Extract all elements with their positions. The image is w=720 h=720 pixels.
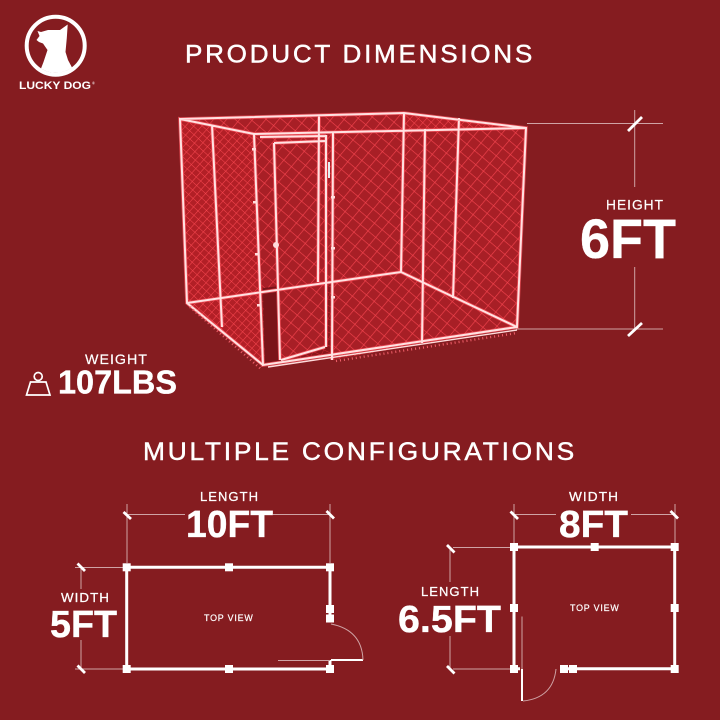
length dimension bbox=[124, 489, 334, 563]
length dimension: LENGTH bbox=[421, 584, 480, 599]
kennel left mesh bbox=[180, 119, 263, 365]
kennel frame bbox=[180, 113, 526, 369]
width dimension bbox=[50, 564, 123, 673]
width dimension: WIDTH bbox=[569, 489, 619, 504]
kennel front right mesh bbox=[332, 128, 526, 360]
kennel door mesh bbox=[275, 142, 325, 360]
top view floor plan: TOP VIEW bbox=[204, 613, 254, 623]
heading: multiple configurations: MULTIPLE CONFIGURATIONS bbox=[143, 438, 577, 466]
weight label: WEIGHT bbox=[85, 351, 148, 367]
length dimension: 6.5FT bbox=[398, 599, 501, 641]
length dimension bbox=[398, 545, 510, 674]
width dimension: 8FT bbox=[559, 504, 628, 546]
top view floor plan bbox=[123, 563, 363, 673]
plan: 8ft by 6.5ft bbox=[398, 489, 679, 701]
kennel back mesh bbox=[180, 113, 404, 303]
height value: 6FT bbox=[580, 207, 676, 270]
kennel door gap bbox=[263, 286, 281, 364]
kennel right mesh bbox=[401, 113, 526, 327]
length dimension: 10FT bbox=[186, 504, 273, 546]
height label: HEIGHT bbox=[606, 196, 664, 212]
logo: Lucky Dog: ® bbox=[92, 80, 95, 86]
length dimension: LENGTH bbox=[200, 489, 259, 504]
icon: weight bbox=[26, 372, 50, 395]
kennel floor bbox=[187, 272, 517, 365]
weight value: 107LBS bbox=[58, 364, 177, 402]
kennel top mesh bbox=[180, 113, 526, 134]
width dimension: WIDTH bbox=[61, 590, 110, 605]
width dimension bbox=[510, 489, 678, 546]
top view floor plan bbox=[510, 543, 679, 701]
kennel illustration bbox=[180, 113, 526, 369]
top view floor plan: TOP VIEW bbox=[570, 603, 620, 613]
title: product dimensions: PRODUCT DIMENSIONS bbox=[185, 40, 535, 68]
height dimension bbox=[516, 110, 676, 336]
width dimension: 5FT bbox=[50, 604, 117, 646]
logo: Lucky Dog: LUCKY DOG bbox=[19, 80, 91, 92]
weight bbox=[26, 351, 177, 402]
plan: 10ft by 5ft bbox=[50, 489, 363, 673]
logo: Lucky Dog bbox=[19, 17, 95, 92]
